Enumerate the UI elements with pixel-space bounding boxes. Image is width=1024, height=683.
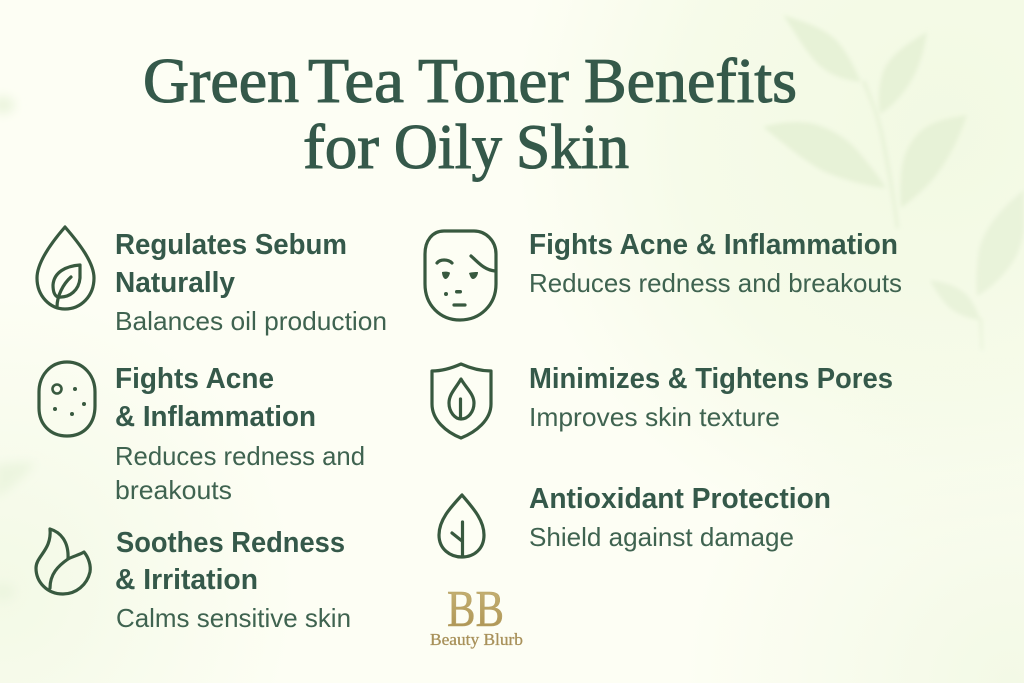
icon: two leaves (36, 529, 90, 594)
title: Skin (516, 112, 629, 182)
title: Oily (394, 112, 502, 182)
decorative blurred leaves, left edge (0, 96, 36, 600)
heading: Soothes Redness (116, 527, 345, 559)
description: Balances oil production (115, 306, 387, 336)
heading: Fights Acne (115, 363, 274, 395)
heading: Fights Acne & Inflammation (529, 229, 898, 261)
decorative tea sprig, lower right (930, 190, 1024, 350)
heading: Antioxidant Protection (529, 483, 831, 515)
icon: droplet with leaf (37, 227, 94, 309)
title: Green (143, 46, 299, 116)
decorative tea sprig, top right (763, 15, 967, 228)
heading: Minimizes & Tightens Pores (529, 363, 893, 395)
benefit: fights acne, right (425, 229, 902, 320)
heading line 2: & Inflammation (115, 401, 316, 433)
description: Calms sensitive skin (116, 603, 351, 633)
logo: Beauty Blurb (430, 581, 523, 649)
benefit: soothes redness (36, 527, 351, 633)
description: Reduces redness and breakouts (529, 268, 902, 298)
benefit: regulates sebum (37, 227, 387, 336)
heading: Regulates Sebum (115, 229, 347, 261)
description: Improves skin texture (529, 402, 780, 432)
benefit: minimizes pores (432, 363, 893, 438)
title: Benefits (584, 46, 797, 116)
benefit: antioxidant protection (439, 483, 831, 557)
description: Reduces redness and (115, 441, 365, 471)
description line 2: breakouts (115, 475, 232, 505)
heading line 2: Naturally (115, 267, 235, 299)
logo: Beauty Blurb: BB (447, 581, 504, 638)
title: Toner (418, 46, 569, 116)
icon: shield with droplet (432, 364, 491, 438)
title: Tea (308, 46, 404, 116)
benefit: fights acne, left (39, 362, 365, 505)
heading line 2: & Irritation (115, 564, 258, 596)
title: for (303, 112, 379, 182)
logo: Beauty Blurb: Beauty Blurb (430, 630, 523, 649)
description: Shield against damage (529, 522, 794, 552)
icon: skin with pores (39, 362, 95, 436)
title (143, 46, 797, 182)
icon: face (425, 231, 496, 320)
icon: leaf (439, 495, 484, 557)
